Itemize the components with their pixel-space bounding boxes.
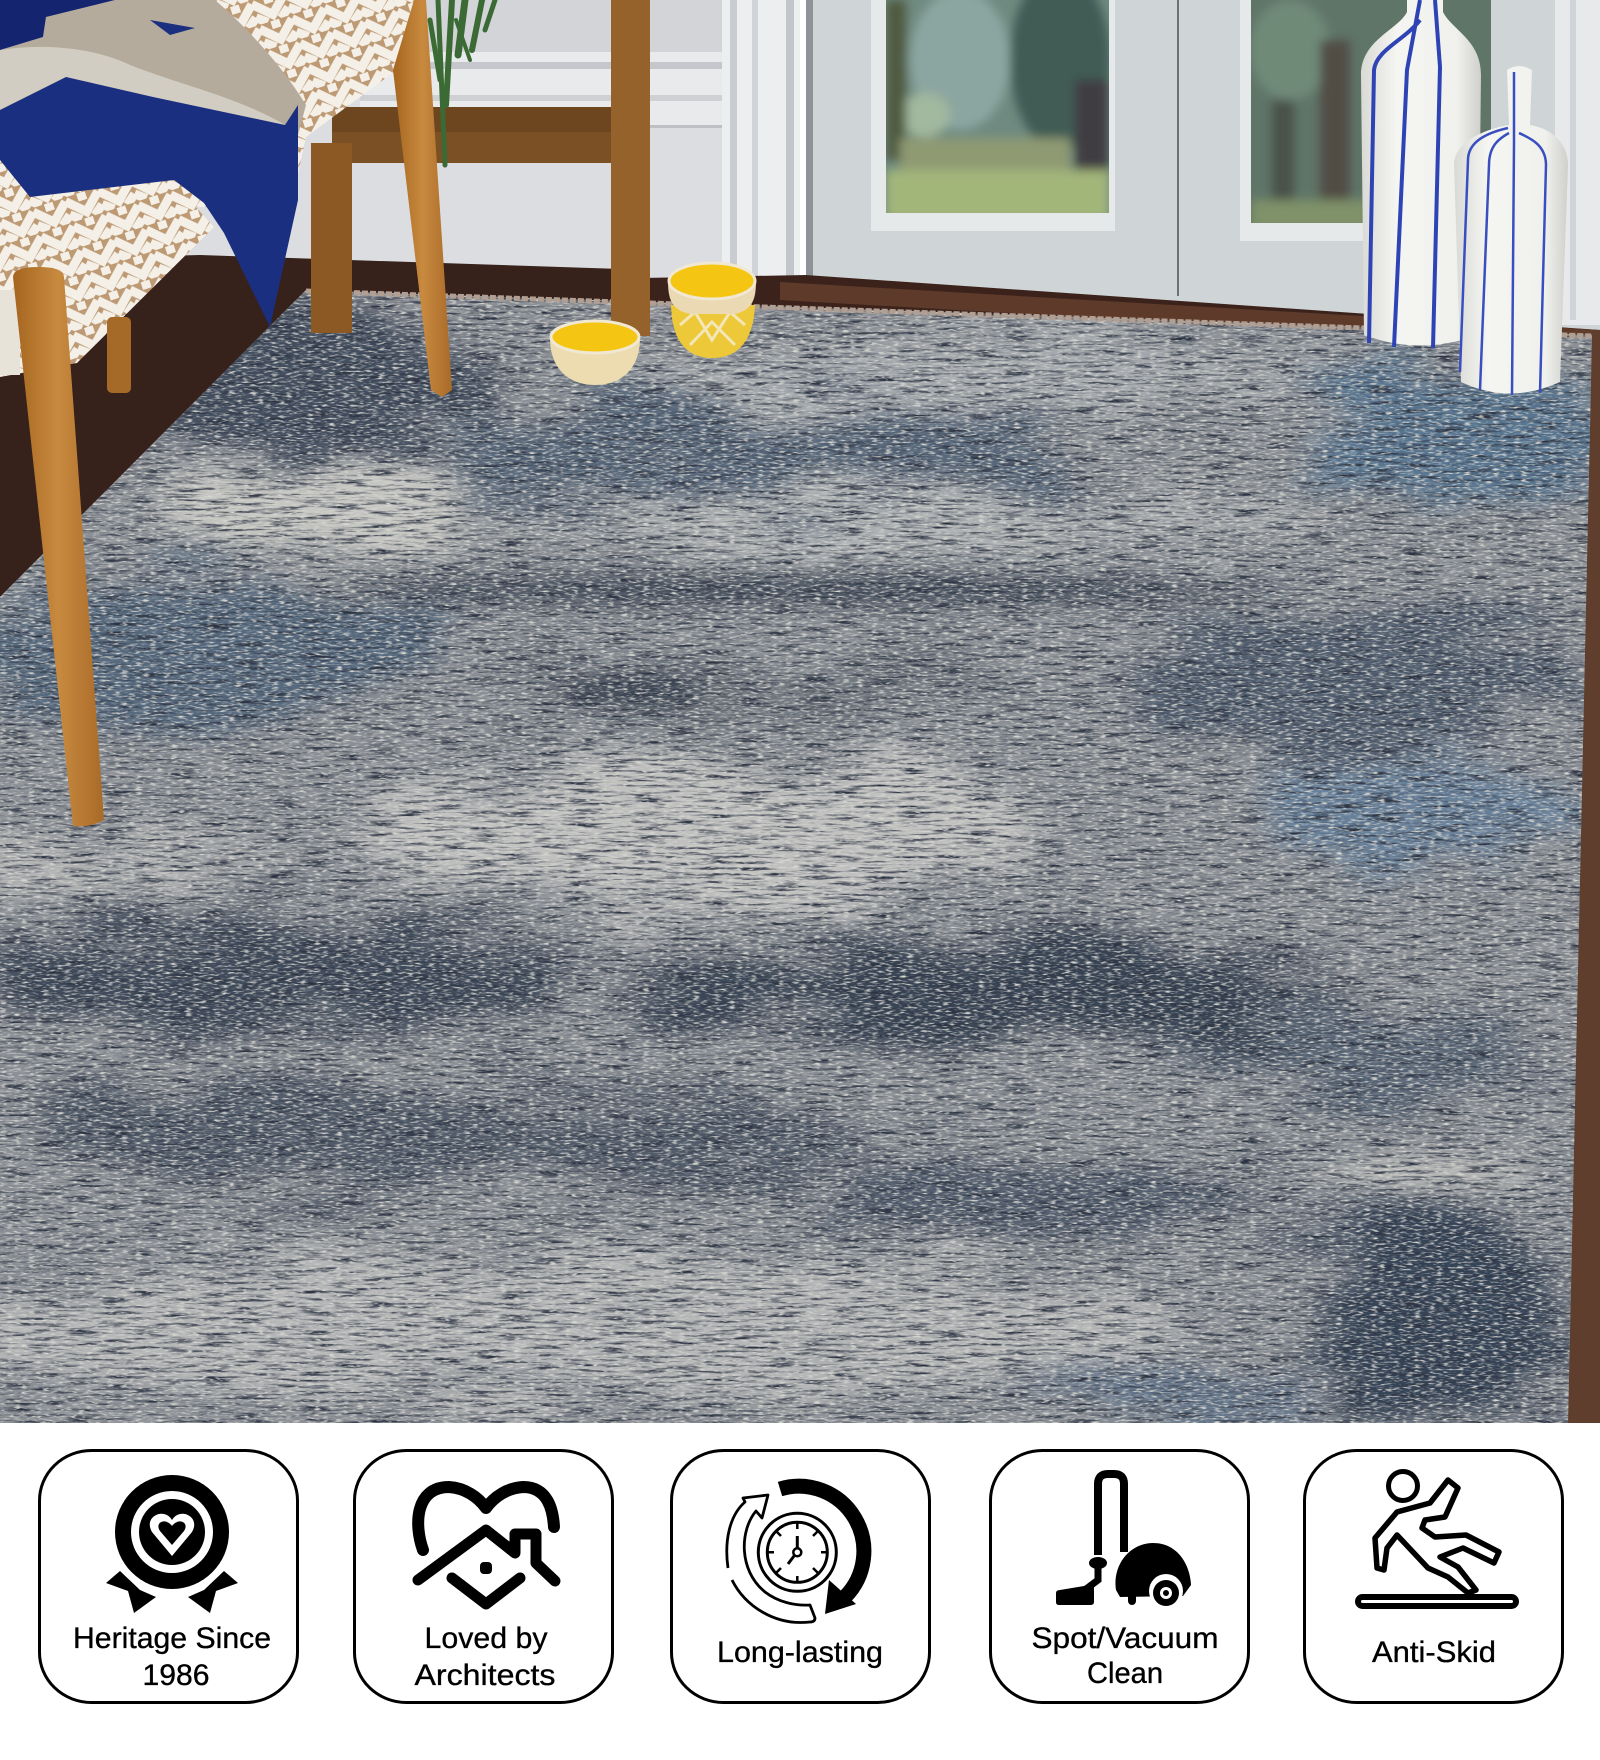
label: Anti-Skid: Anti-Skid <box>1372 1636 1496 1669</box>
label: Heritage Since 1986: Heritage Since <box>73 1622 271 1655</box>
label: Loved by Architects <box>414 1622 556 1692</box>
card: Loved by Architects <box>354 1450 612 1702</box>
white footer band <box>0 1423 1600 1760</box>
chair back legs and rail <box>311 0 650 336</box>
card: Heritage Since 1986 <box>40 1450 298 1702</box>
rug tonal patches <box>0 300 1600 1430</box>
floor <box>0 255 1600 1423</box>
icon: vacuum cleaner <box>1056 1474 1191 1608</box>
striped vases <box>1361 0 1568 395</box>
plant <box>430 0 495 165</box>
label: Spot/Vacuum Clean: Clean <box>1087 1657 1163 1690</box>
label: Long-lasting: Long-lasting <box>717 1636 883 1669</box>
rug dark streaks <box>300 577 1540 1184</box>
label: Spot/Vacuum Clean: Spot/Vacuum <box>1032 1622 1218 1655</box>
card: Long-lasting <box>672 1450 930 1702</box>
icon: clock with circular arrows <box>727 1486 864 1623</box>
card: Spot/Vacuum Clean <box>990 1450 1248 1702</box>
rug fringe <box>306 291 1592 336</box>
label: Spot/Vacuum Clean <box>1032 1622 1218 1690</box>
label: Heritage Since 1986: 1986 <box>142 1659 210 1692</box>
card: Anti-Skid <box>1304 1450 1562 1702</box>
wall and baseboard <box>0 0 800 300</box>
icon: slipping person <box>1358 1472 1516 1606</box>
rug woven texture <box>0 280 1600 1430</box>
bench legs <box>13 0 452 826</box>
icon: ribbon badge with heart <box>106 1475 238 1613</box>
blanket <box>0 0 306 327</box>
yellow bowls <box>550 263 756 385</box>
french doors with windows <box>806 0 1600 330</box>
label: Loved by Architects: Architects <box>414 1659 556 1692</box>
label: Heritage Since 1986 <box>73 1622 271 1692</box>
label: Loved by Architects: Loved by <box>424 1622 548 1655</box>
icon: heart and house <box>418 1487 555 1604</box>
bench woven seat <box>0 0 414 377</box>
rug <box>0 280 1600 1430</box>
